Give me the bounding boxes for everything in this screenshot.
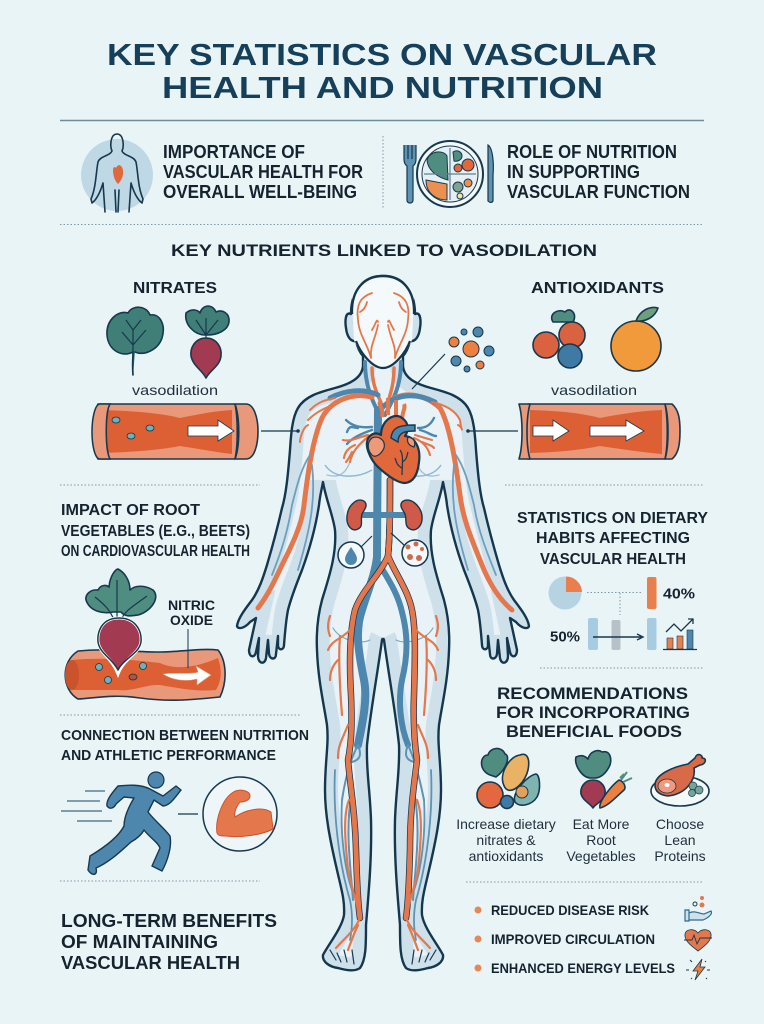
label: vasodilation: vasodilation [551, 382, 637, 398]
text: food recommendations: Vegetables [566, 848, 636, 864]
heading: connection: AND ATHLETIC PERFORMANCE [61, 747, 276, 764]
label: nitric oxide: OXIDE [170, 613, 213, 628]
bar chart with labels: 40% [663, 586, 695, 602]
icon: blood drop callout [338, 536, 372, 568]
heading: impact of root vegetables [61, 502, 250, 560]
heading: long-term benefits: LONG-TERM BENEFITS [61, 911, 277, 931]
icon: berries [533, 310, 585, 368]
chest branches [343, 418, 436, 462]
heading: connection: CONNECTION BETWEEN NUTRITION [61, 727, 309, 744]
title [107, 37, 657, 105]
icon: molecule cluster [412, 327, 494, 389]
icon: vessel with arrows [519, 404, 680, 459]
icon: beet and carrot [576, 751, 632, 808]
heading: statistics: HABITS AFFECTING [536, 530, 690, 547]
icon: plate with fork and knife [404, 141, 493, 207]
text: food recommendations: Root [586, 832, 616, 848]
panel: impact of root vegetables [61, 502, 250, 700]
text: food recommendations: Lean [664, 832, 696, 848]
heading: statistics [517, 510, 708, 568]
bullet: reduced disease risk: REDUCED DISEASE RISK [491, 902, 649, 918]
heading: connection [61, 727, 309, 764]
title: KEY STATISTICS ON VASCULAR [107, 37, 657, 72]
heading: impact of root vegetables: ON CARDIOVASCULAR HEALTH [61, 543, 250, 560]
heading: recommendations: BENEFICIAL FOODS [506, 722, 682, 741]
connector line [466, 429, 518, 433]
arm arteries and veins [258, 391, 512, 610]
panel: dietary habit statistics [517, 510, 708, 650]
heart [367, 398, 419, 483]
bullet: improved circulation: IMPROVED CIRCULATION [491, 931, 655, 947]
text: food recommendations: antioxidants [469, 848, 543, 864]
heading: impact of root vegetables: VEGETABLES (E.G., BEETS) [61, 523, 250, 540]
icon: lean protein [651, 755, 709, 806]
panel: antioxidants [466, 280, 680, 459]
leg branches [328, 616, 438, 950]
text: role of nutrition [507, 142, 690, 202]
panel: importance of vascular health [81, 134, 363, 212]
vena cava and aorta [335, 410, 431, 940]
human body with vessels [237, 276, 529, 970]
neck vessels [365, 362, 401, 415]
heading: nitrates: NITRATES [133, 280, 217, 297]
title: HEALTH AND NUTRITION [162, 70, 603, 105]
text: food recommendations: Increase dietary [456, 816, 556, 832]
text: food recommendations: Choose [656, 816, 704, 832]
icon: spinach [107, 307, 163, 375]
text: role of nutrition: IN SUPPORTING [507, 162, 640, 182]
icon: flexed arm [203, 777, 277, 851]
bar chart with labels [550, 577, 695, 650]
heading: statistics: STATISTICS ON DIETARY [517, 510, 708, 527]
panel: nitrates [92, 280, 300, 459]
panel: long-term benefits list [474, 896, 712, 980]
pie chart [548, 576, 582, 610]
panel: connection between nutrition and performance [61, 727, 309, 874]
text: food recommendations: Eat More [573, 816, 630, 832]
icon: mixed foods [477, 748, 540, 808]
bullet: enhanced energy: ENHANCED ENERGY LEVELS [491, 960, 675, 976]
icon: caring hand [685, 896, 711, 921]
icon: runner [61, 772, 198, 874]
icon: artery with beet [65, 569, 225, 700]
icon: vessel with arrow [92, 404, 258, 459]
text: food recommendations: nitrates & [476, 832, 536, 848]
heading: long-term benefits: VASCULAR HEALTH [61, 953, 240, 973]
text: importance: IMPORTANCE OF [163, 142, 305, 162]
heading: long-term benefits: OF MAINTAINING [61, 932, 218, 952]
kidneys [347, 500, 422, 530]
text: food recommendations [456, 816, 706, 864]
panel: role of nutrition [404, 141, 690, 207]
icon: heart with pulse [684, 930, 712, 951]
heading: key nutrients: KEY NUTRIENTS LINKED TO VASODILATION [171, 241, 597, 260]
heading: long-term benefits [61, 911, 277, 973]
icon: lightning bolt [686, 959, 710, 980]
heading: impact of root vegetables: IMPACT OF ROOT [61, 502, 200, 519]
text: role of nutrition: VASCULAR FUNCTION [507, 182, 690, 202]
text: role of nutrition: ROLE OF NUTRITION [507, 142, 677, 162]
icon: beet [186, 306, 229, 378]
heading: recommendations [496, 684, 690, 741]
heading: antioxidants: ANTIOXIDANTS [531, 280, 664, 297]
head vessels [358, 293, 408, 358]
icon: cells callout [391, 533, 428, 566]
icon: growth chart [663, 619, 697, 650]
text: food recommendations: Proteins [654, 848, 706, 864]
panel: recommendations [456, 684, 709, 864]
heading: recommendations: FOR INCORPORATING [496, 703, 690, 722]
body outline [237, 276, 529, 970]
text: importance: VASCULAR HEALTH FOR [163, 162, 363, 182]
text: importance [163, 142, 363, 202]
icon: orange [611, 308, 661, 371]
label: nitric oxide [168, 598, 215, 668]
label: vasodilation: vasodilation [132, 382, 218, 398]
text: importance: OVERALL WELL-BEING [163, 182, 357, 202]
label: nitric oxide: NITRIC [168, 598, 215, 613]
heading: recommendations: RECOMMENDATIONS [497, 684, 688, 703]
bar chart with labels: 50% [550, 628, 580, 646]
heading: statistics: VASCULAR HEALTH [540, 551, 686, 568]
connector line [261, 429, 300, 433]
icon: human with heart [81, 134, 153, 212]
